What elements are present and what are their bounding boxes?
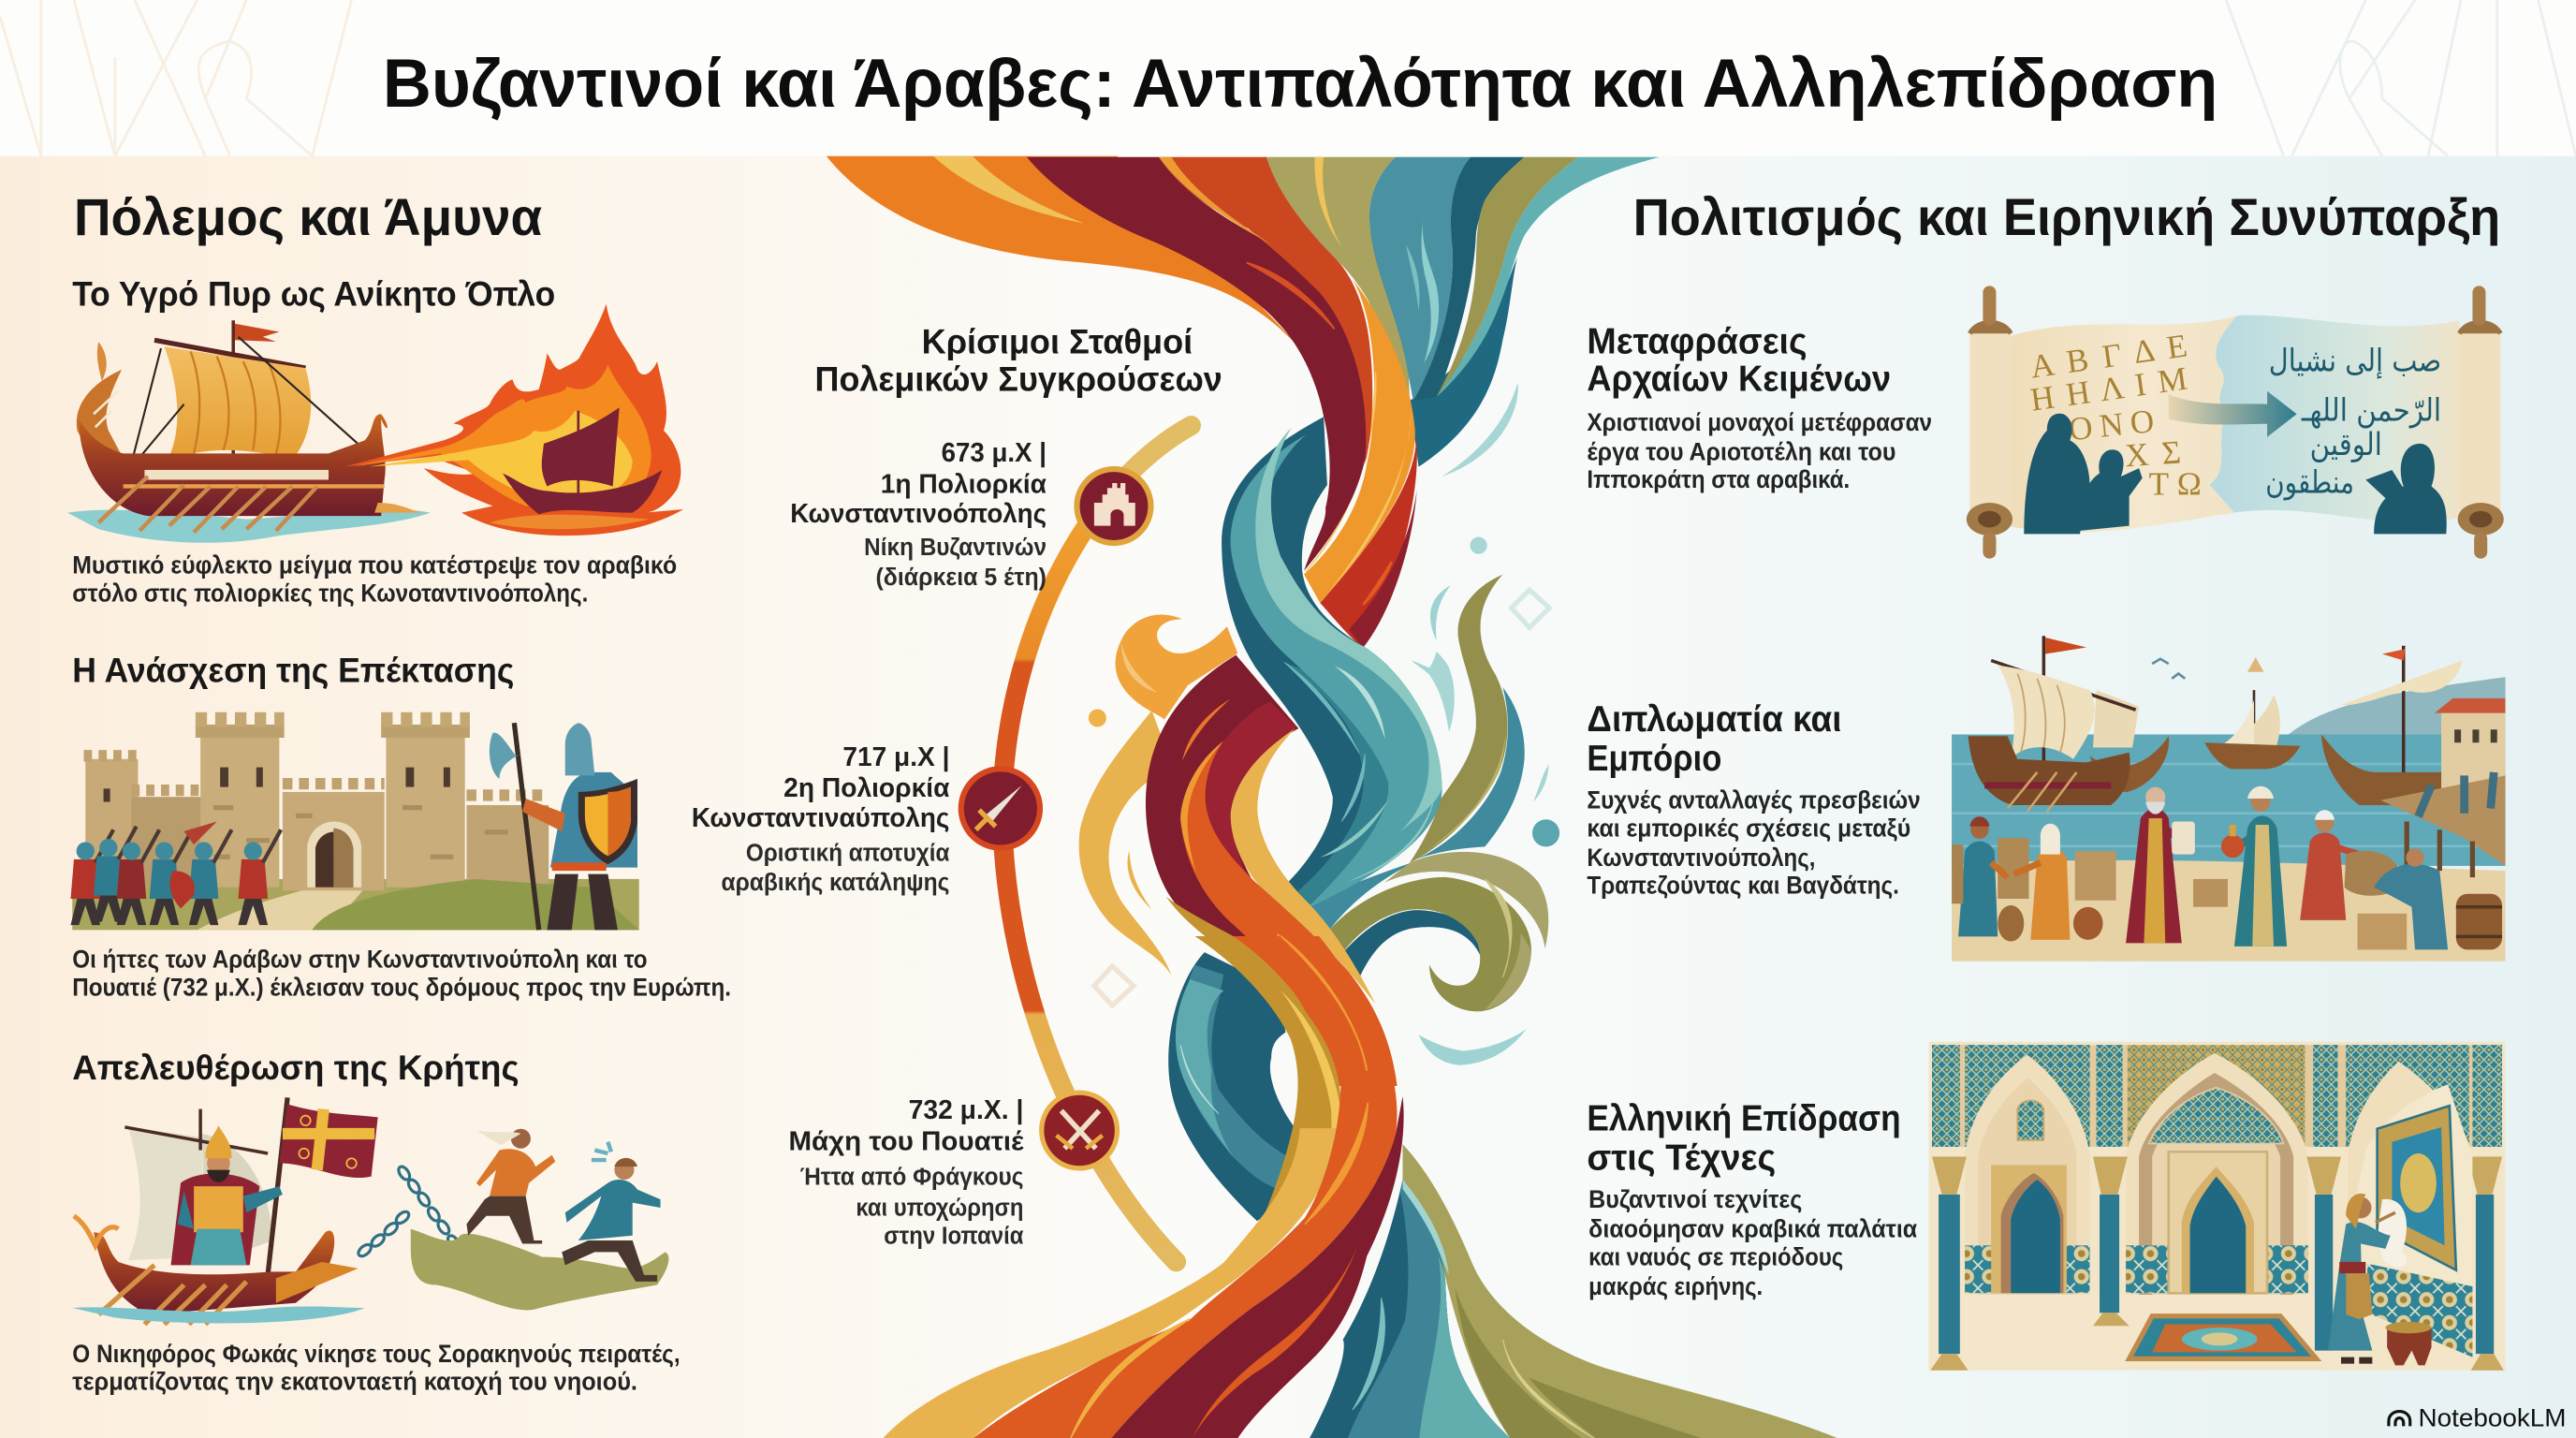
icon: fortress [1076, 469, 1150, 543]
ship: back [2089, 690, 2169, 792]
Greek letters: Α Β Γ Δ Ε [2028, 328, 2189, 386]
title band [0, 0, 2576, 156]
Arabic text: الرّحمن اللهـ [2301, 391, 2441, 429]
heading: milestones: Πολεμικών Συγκρούσεων [815, 360, 1222, 399]
accent dots and diamonds [1089, 537, 1559, 1005]
text: greek fire: στόλο στις πολιορκίες της Κωνοταντινοόπολης. [72, 578, 588, 607]
block: diplomacy: Εμπόριο [1587, 739, 1721, 779]
painter [2328, 1194, 2407, 1364]
milestone 732: Ήττα από Φράγκους [800, 1162, 1023, 1190]
Greek letters: Ο Ν Ο [2067, 403, 2156, 448]
milestone 732: 732 μ.Χ. | [909, 1095, 1023, 1125]
runner: orange [466, 1129, 555, 1244]
illustration: greek fire ship [67, 304, 683, 543]
Arabic text: منطقون [2265, 464, 2354, 501]
illustration: liberation of Crete [72, 1097, 668, 1325]
text: containment: Οι ήττες των Αράβων στην Κωνσταντινούπολη και το [72, 945, 648, 974]
runner: blue [562, 1142, 661, 1282]
lower teal lobe and olive [1168, 952, 1837, 1438]
block: arts: Βυζαντινοί τεχνίτες [1588, 1184, 1802, 1213]
icon: broken chain [357, 1165, 461, 1258]
Arabic text: الوقين [2310, 426, 2382, 463]
Arabic text: صب إلى نشيال [2269, 343, 2441, 380]
text: greek fire: Μυστικό εύφλεκτο μείγμα που κατέστρεψε τον αραβικό [72, 550, 677, 580]
block: diplomacy: Κωνσταντινούπολης, [1587, 843, 1815, 872]
text: greek fire [72, 550, 677, 607]
commander [171, 1125, 283, 1265]
block: translations: έργα του Αριοτοτέλη και του [1587, 436, 1895, 465]
subheading: greek fire: Το Υγρό Πυρ ως Ανίκητο Όπλο [72, 274, 555, 313]
milestone 732: και υποχώρηση [856, 1194, 1023, 1222]
columns [1930, 1157, 2504, 1371]
NotebookLM logo: NotebookLM [2419, 1402, 2566, 1431]
arrow: translation [2169, 391, 2297, 437]
text: containment: Πουατιέ (732 μ.Χ.) έκλεισαν τους δρόμους προς την Ευρώπη. [72, 973, 731, 1002]
ship: right [2321, 646, 2463, 805]
stool [2387, 1328, 2432, 1365]
Greek letters [2028, 328, 2202, 502]
illustration: scroll [1967, 286, 2504, 559]
subheading: crete: Απελευθέρωση της Κρήτης [72, 1049, 520, 1087]
ship: left [1969, 636, 2136, 812]
ship: middle [2204, 657, 2300, 769]
block: translations: Χριστιανοί μοναχοί μετέφρασαν [1587, 407, 1932, 436]
subheading: containment: Η Ανάσχεση της Επέκτασης [72, 651, 514, 689]
block: diplomacy: και εμπορικές σχέσεις μεταξύ [1587, 813, 1910, 842]
lower yellow, orange ribbons [1166, 728, 1398, 1086]
milestone 673: 1η Πολιορκία [881, 470, 1046, 500]
right wall with tapestry [2334, 1084, 2472, 1298]
right flourishes, left gold flourish and maroon band [1079, 417, 1548, 1065]
illustration: palace [1928, 1042, 2506, 1371]
block: arts [1587, 1098, 1917, 1300]
text: containment [72, 945, 731, 1002]
heading: milestones: Κρίσιμοι Σταθμοί [922, 322, 1193, 360]
milestone 717 [692, 742, 950, 896]
icon: crossed swords [1042, 1093, 1117, 1168]
doors and dado [1965, 1245, 2089, 1293]
milestone 732 [788, 1095, 1024, 1250]
merchants [1952, 786, 2502, 949]
illustration: castle and soldiers [70, 720, 639, 930]
text: crete: τερματίζοντας την εκατονταετή κατοχή του νηοιού. [72, 1367, 637, 1396]
milestone 673: (διάρκεια 5 έτη) [875, 563, 1046, 591]
milestone 717: 717 μ.Χ | [842, 742, 949, 772]
text: crete [72, 1339, 681, 1396]
block: diplomacy: Συχνές ανταλλαγές πρεσβειών [1587, 785, 1921, 814]
block: diplomacy [1587, 699, 1921, 900]
milestone 717: Οριστική αποτυχία [746, 839, 949, 867]
icon: sword [961, 769, 1040, 848]
block: translations: Ιπποκράτη στα αραβικά. [1587, 464, 1850, 493]
milestone 673: Νίκη Βυζαντινών [864, 533, 1046, 561]
text: crete: Ο Νικηφόρος Φωκάς νίκησε τους Σορακηνούς πειρατές, [72, 1339, 681, 1368]
figures: monks and reader [2024, 414, 2447, 534]
Greek letters: Η Η Λ Ι Μ [2028, 360, 2189, 418]
milestone 717: Κωνσταντιναύπολης [692, 803, 949, 833]
block: translations: Αρχαίων Κειμένων [1587, 360, 1891, 400]
milestone 732: Μάχη του Πουατιέ [788, 1127, 1024, 1157]
central intertwined ribbons [827, 156, 1837, 1438]
milestone 732: στην Ιοπανία [884, 1222, 1023, 1250]
block: translations [1587, 321, 1932, 493]
block: arts: μακράς ειρήνης. [1588, 1271, 1763, 1300]
panel: culture and coexistence [1587, 188, 2566, 1431]
teal S ribbon [1222, 417, 1442, 909]
title: Βυζαντινοί και Άραβες: Αντιπαλότητα και Αλληλεπίδραση [383, 44, 2217, 122]
milestone 717: 2η Πολιορκία [783, 773, 950, 803]
Greek letters: Τ Ω [2149, 465, 2202, 502]
block: diplomacy: Διπλωματία και [1587, 699, 1841, 740]
milestone 717: αραβικής κατάληψης [721, 868, 949, 896]
Greek letters: Χ Σ [2124, 433, 2182, 474]
block: translations: Μεταφράσεις [1587, 321, 1808, 361]
block: arts: διαοόμησαν κραβικά παλάτια [1588, 1214, 1917, 1243]
milestone 673: 673 μ.Χ | [942, 438, 1046, 468]
illustration: harbour [1952, 636, 2506, 961]
panel: war and defense [67, 188, 731, 1396]
panel: timeline texts [692, 322, 1222, 1250]
milestone 673 [790, 438, 1046, 591]
Arabic text [2265, 343, 2441, 501]
milestone 673: Κωνσταντινοόπολης [790, 499, 1046, 529]
floor [1962, 1295, 2364, 1367]
block: arts: Ελληνική Επίδραση [1587, 1098, 1901, 1138]
arches [1965, 1055, 2089, 1298]
icon: flames [345, 304, 683, 536]
timeline arc [961, 426, 1191, 1262]
heading: war: Πόλεμος και Άμυνα [74, 188, 542, 246]
block: diplomacy: Τραπεζούντας και Βαγδάτης. [1587, 871, 1899, 900]
heading: milestones [815, 322, 1222, 399]
building and pier [2380, 698, 2506, 877]
upper maroon and red ribbons [1027, 157, 1372, 571]
heading: culture: Πολιτισμός και Ειρηνική Συνύπαρξη [1633, 188, 2500, 246]
block: arts: και ναυός σε περιόδους [1588, 1241, 1843, 1270]
block: arts: στις Τέχνες [1587, 1138, 1776, 1179]
